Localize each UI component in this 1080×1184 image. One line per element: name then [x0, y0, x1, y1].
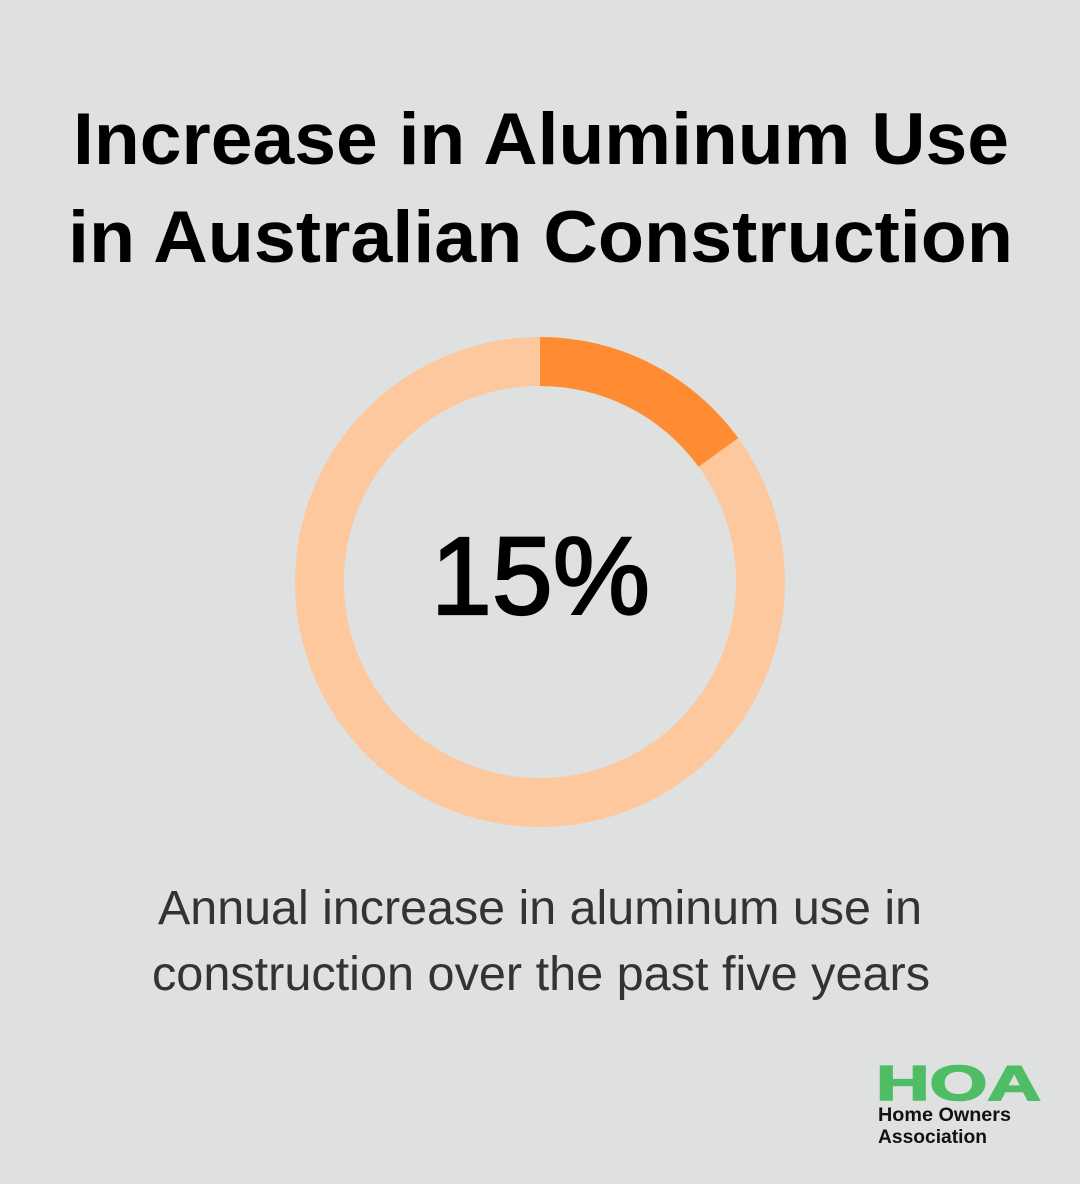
description text: construction over the past five years	[152, 948, 930, 1001]
title	[68, 99, 1013, 278]
big stat value: 15%	[431, 515, 650, 638]
logo: HOA Home Owners Association: Home Owners	[878, 1105, 1011, 1126]
donut chart: 15%	[320, 337, 760, 802]
description text: Annual increase in aluminum use in	[158, 882, 922, 935]
title: Increase in Aluminum Use	[73, 99, 1009, 180]
title: in Australian Construction	[68, 197, 1013, 278]
logo: HOA Home Owners Association: HOA	[876, 1057, 1041, 1111]
logo: HOA Home Owners Association	[876, 1057, 1041, 1148]
description text	[152, 882, 930, 1001]
logo: HOA Home Owners Association: Association	[878, 1127, 987, 1148]
